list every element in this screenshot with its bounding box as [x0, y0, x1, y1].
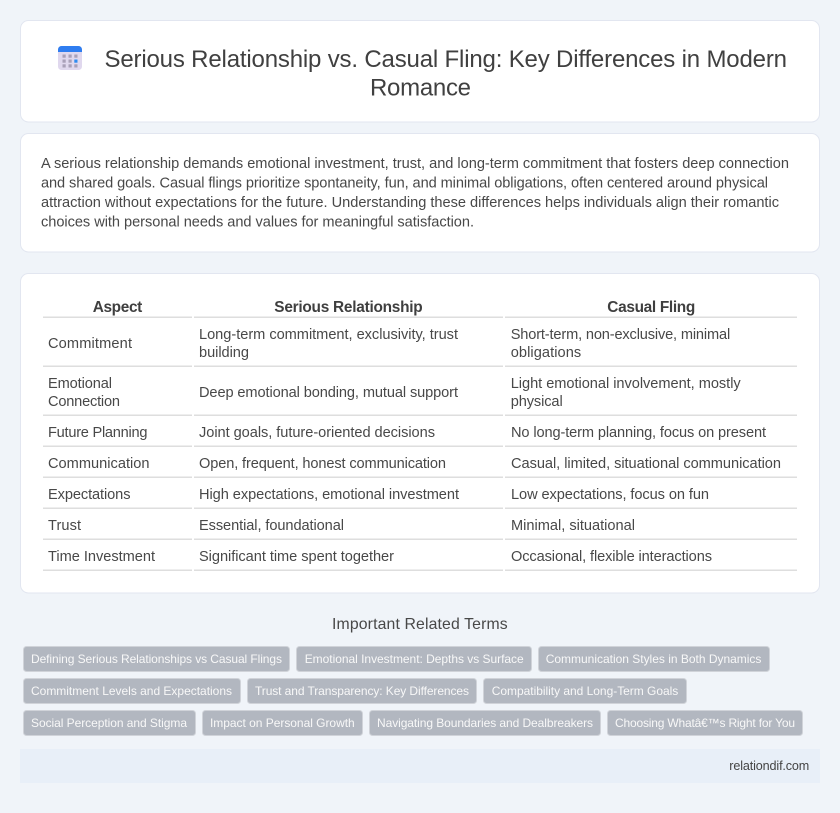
- row: future planning: [48, 425, 766, 441]
- tag: Commitment Levels and Expectations: [31, 684, 232, 698]
- title: [104, 46, 787, 102]
- tag: Trust and Transparency: Key Differences: [255, 684, 469, 698]
- row: future planning: Joint goals, future-oriented decisions: [199, 425, 435, 441]
- row: future planning: Future Planning: [48, 425, 148, 441]
- tag: [248, 678, 476, 704]
- intro text block: choices with personal needs and values for meaningful satisfaction.: [41, 214, 474, 230]
- tag: Emotional Investment: Depths vs Surface: [305, 652, 524, 666]
- intro text block: A serious relationship demands emotional investment, trust, and long-term commitment that fosters deep connection: [41, 156, 789, 172]
- row: future planning: No long-term planning, focus on present: [511, 425, 766, 441]
- row: emotional connection: physical: [511, 394, 563, 410]
- intro text block: attraction without expectations for the future. Understanding these differences helps individuals align their romantic: [41, 195, 779, 211]
- row: trust: [48, 518, 635, 534]
- panel: intro: [20, 134, 820, 252]
- tag: Defining Serious Relationships vs Casual Flings: [31, 652, 282, 666]
- tag: [24, 646, 290, 672]
- row: expectations: High expectations, emotional investment: [199, 487, 459, 503]
- tag: Communication Styles in Both Dynamics: [546, 652, 761, 666]
- row: trust: Minimal, situational: [511, 518, 635, 534]
- panel: comparison table: [20, 274, 820, 593]
- row: emotional connection: [48, 376, 741, 410]
- intro text block: [41, 156, 789, 230]
- row: commitment: Long-term commitment, exclusivity, trust: [199, 327, 458, 343]
- heading: important related terms: Important Related Terms: [332, 616, 508, 633]
- row: expectations: [48, 487, 709, 503]
- row: trust: Essential, foundational: [199, 518, 344, 534]
- table header: Aspect: [93, 299, 142, 316]
- row: commitment: Short-term, non-exclusive, minimal: [511, 327, 730, 343]
- row: time investment: [48, 549, 712, 565]
- row: time investment: Occasional, flexible interactions: [511, 549, 712, 565]
- row: emotional connection: Emotional: [48, 376, 112, 392]
- tag: Navigating Boundaries and Dealbreakers: [377, 716, 593, 730]
- table header: Casual Fling: [607, 299, 695, 316]
- row: commitment: Commitment: [48, 336, 132, 352]
- tag: [370, 710, 600, 736]
- tag: [202, 710, 362, 736]
- row: communication: Open, frequent, honest communication: [199, 456, 446, 472]
- related term tags: [24, 646, 802, 736]
- row: commitment: building: [199, 345, 249, 361]
- icon: calendar: [58, 46, 82, 70]
- row: commitment: [48, 327, 730, 361]
- tag: [608, 710, 802, 736]
- row: emotional connection: Deep emotional bonding, mutual support: [199, 385, 458, 401]
- row: expectations: Low expectations, focus on fun: [511, 487, 709, 503]
- intro text block: and shared goals. Casual flings prioritize spontaneity, fun, and minimal obligations, often centered around physical: [41, 176, 768, 192]
- tag: Compatibility and Long-Term Goals: [492, 684, 678, 698]
- tag: [24, 710, 196, 736]
- title: Serious Relationship vs. Casual Fling: Key Differences in Modern: [104, 46, 787, 73]
- row: time investment: Time Investment: [48, 549, 155, 565]
- row: communication: Communication: [48, 456, 150, 472]
- row: emotional connection: Light emotional involvement, mostly: [511, 376, 741, 392]
- table header: [93, 299, 695, 316]
- title: Romance: [370, 74, 471, 102]
- tag: [296, 646, 532, 672]
- tag: [24, 678, 240, 704]
- row: communication: [48, 456, 781, 472]
- row: commitment: obligations: [511, 345, 581, 361]
- footer: relationdif.com: [729, 759, 809, 773]
- row: time investment: Significant time spent together: [199, 549, 394, 565]
- row: emotional connection: Connection: [48, 394, 120, 410]
- tag: [538, 646, 770, 672]
- row: trust: Trust: [48, 518, 81, 534]
- row: expectations: Expectations: [48, 487, 130, 503]
- table header: Serious Relationship: [274, 299, 423, 316]
- panel: header: [20, 20, 820, 122]
- tag: Choosing Whatâ€™s Right for You: [615, 716, 795, 730]
- tag: [484, 678, 686, 704]
- tag: Impact on Personal Growth: [210, 716, 355, 730]
- tag: Social Perception and Stigma: [31, 716, 187, 730]
- row: communication: Casual, limited, situational communication: [511, 456, 781, 472]
- footer: [20, 749, 820, 783]
